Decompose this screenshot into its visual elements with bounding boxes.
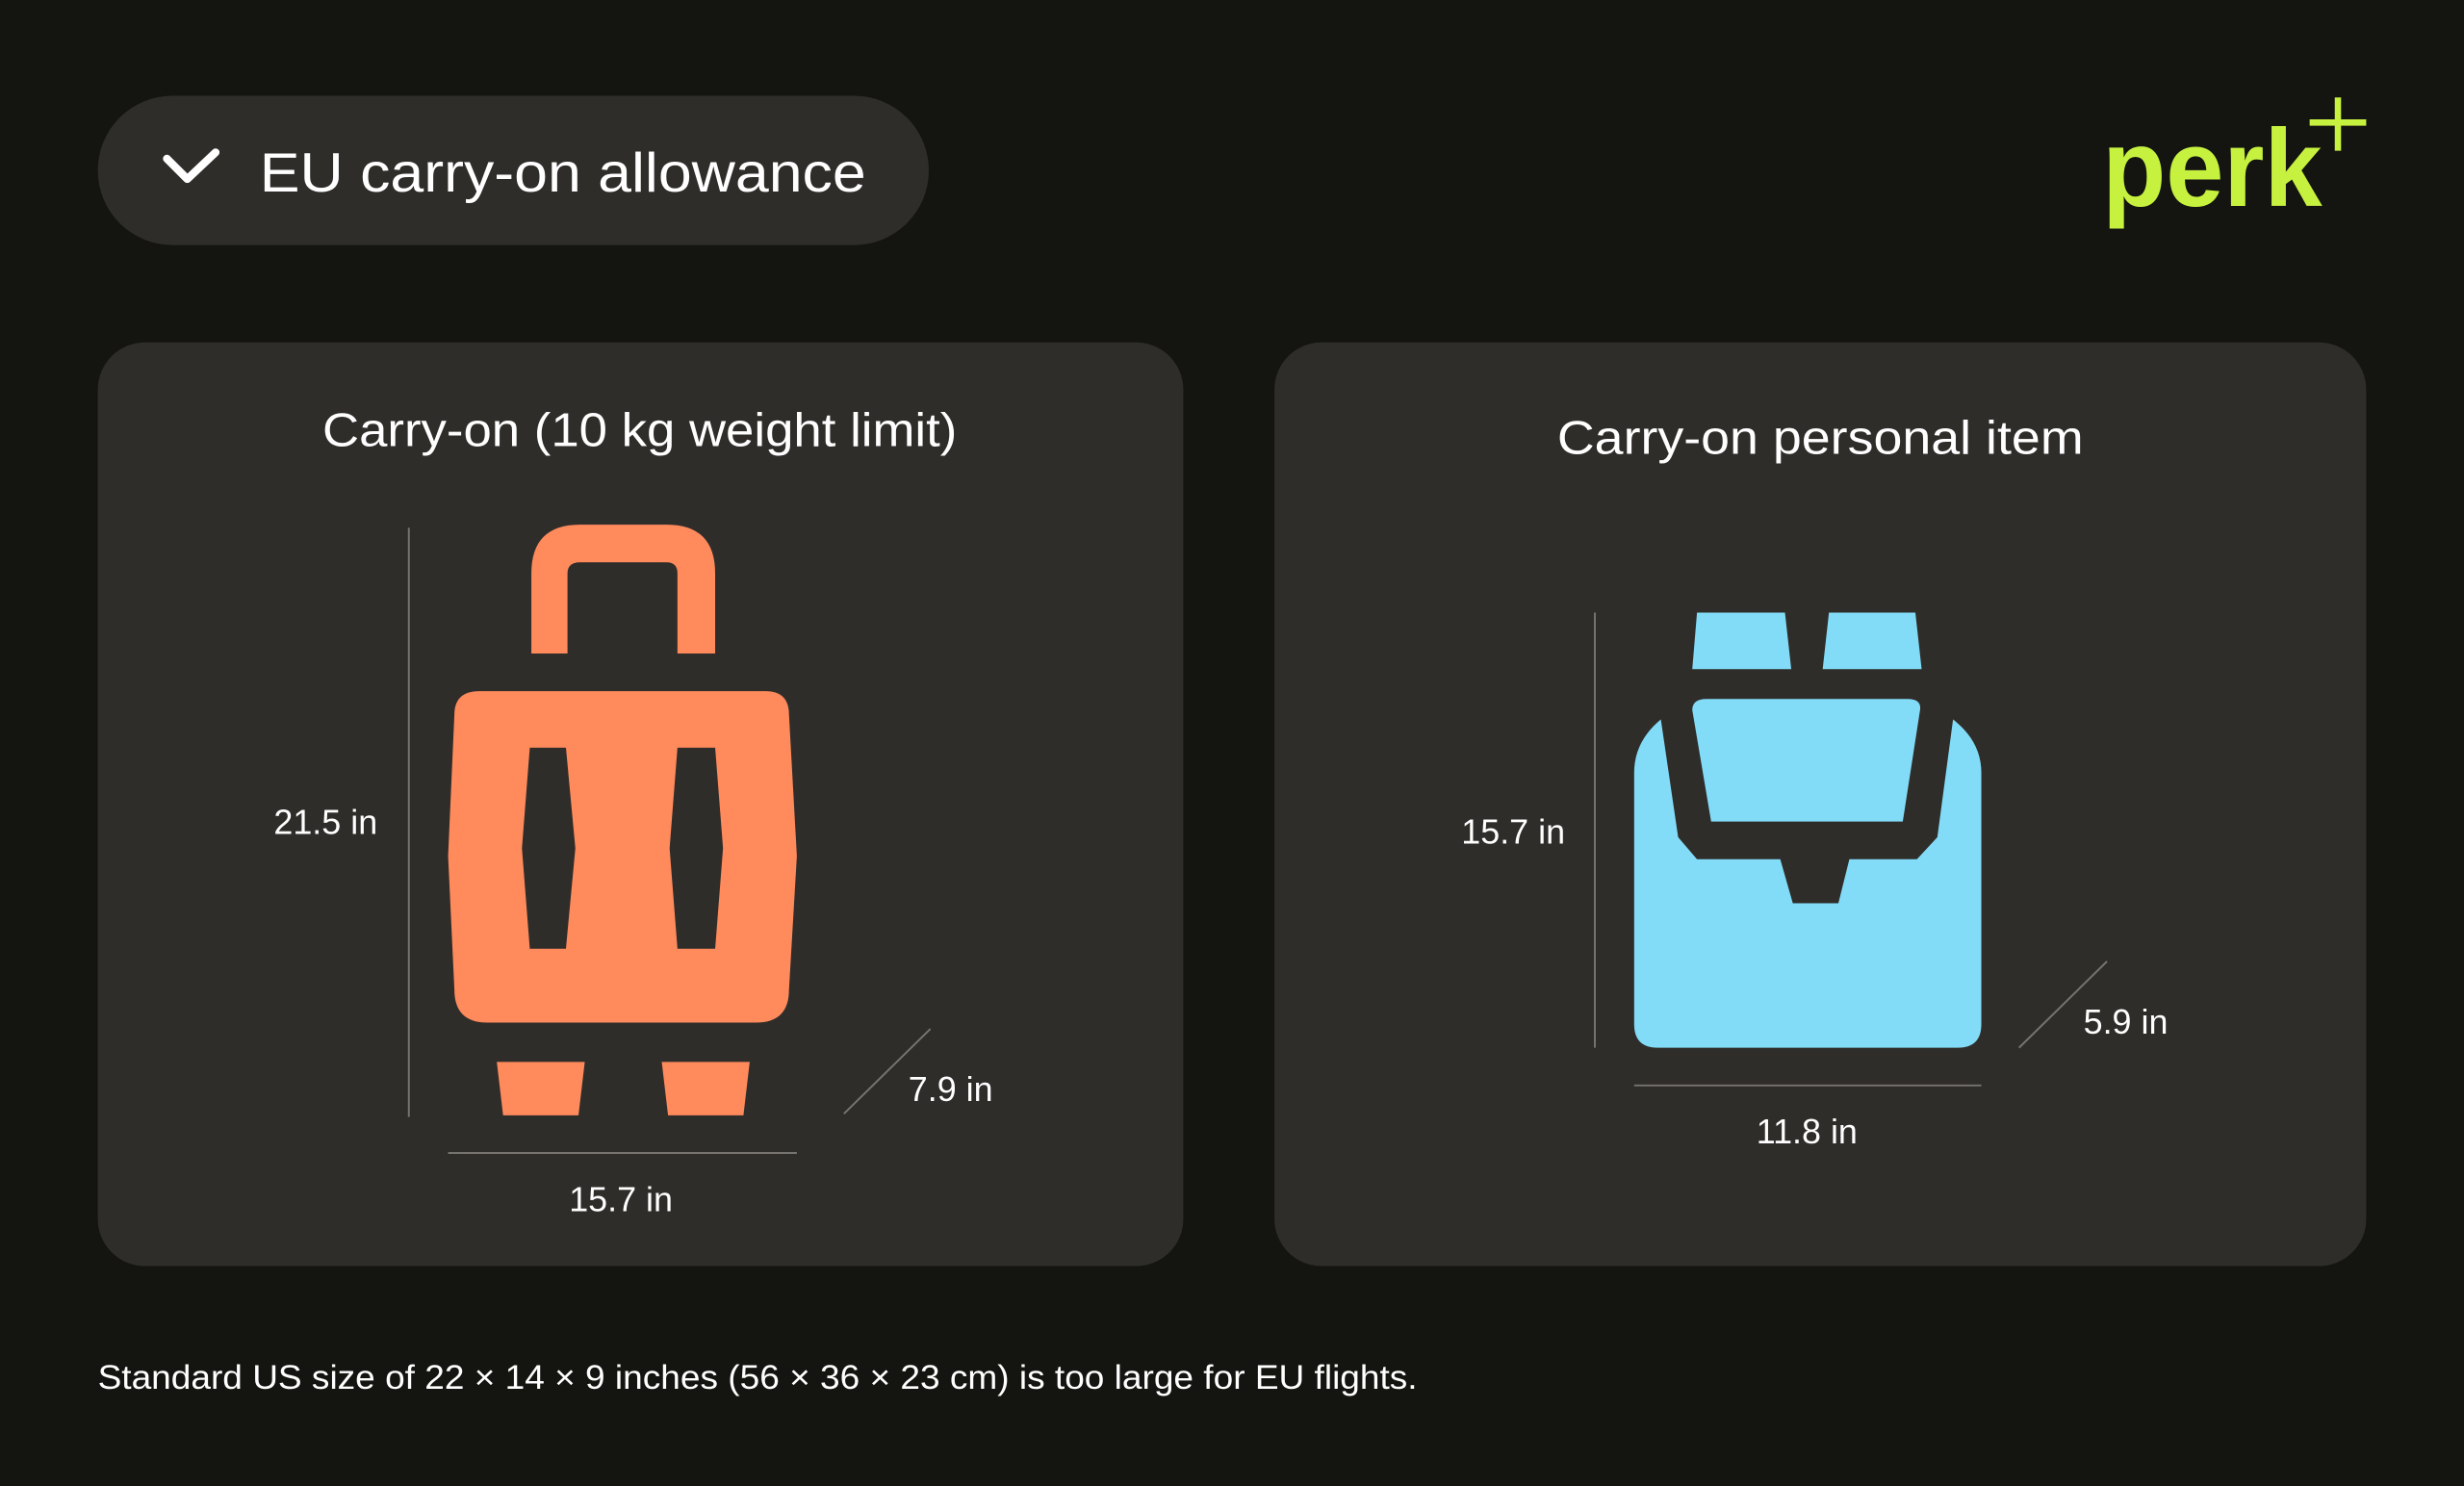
- dimension lines: backpack: [1595, 613, 2107, 1086]
- icon: suitcase: [449, 525, 797, 1115]
- dimension labels: backpack: 15.7 in: [1461, 812, 1565, 851]
- dimension labels: backpack: 5.9 in: [2084, 1003, 2168, 1041]
- panel: personal item: [1274, 343, 2366, 1267]
- panel title: personal item: Carry-on personal item: [1557, 413, 2084, 465]
- header title: EU carry-on allowance: [260, 142, 866, 204]
- dimension labels: suitcase: [273, 804, 993, 1218]
- dimension labels: backpack: [1461, 812, 2168, 1151]
- dimension labels: backpack: 11.8 in: [1757, 1113, 1858, 1151]
- panel title: carry-on: Carry-on (10 kg weight limit): [322, 405, 957, 457]
- icon: checkmark: [167, 152, 216, 179]
- header pill: [98, 96, 929, 245]
- panel: carry-on: [98, 343, 1183, 1267]
- footnote: Standard US size of 22 × 14 × 9 inches (56 × 36 × 23 cm) is too large for EU flights.: [98, 1359, 1418, 1396]
- dimension labels: suitcase: 7.9 in: [909, 1070, 993, 1109]
- icon: backpack: [1634, 613, 1982, 1048]
- dimension labels: suitcase: 21.5 in: [273, 804, 377, 842]
- dimension lines: suitcase: [409, 527, 931, 1153]
- logo: perk: perk: [2102, 108, 2323, 230]
- dimension labels: suitcase: 15.7 in: [569, 1180, 673, 1218]
